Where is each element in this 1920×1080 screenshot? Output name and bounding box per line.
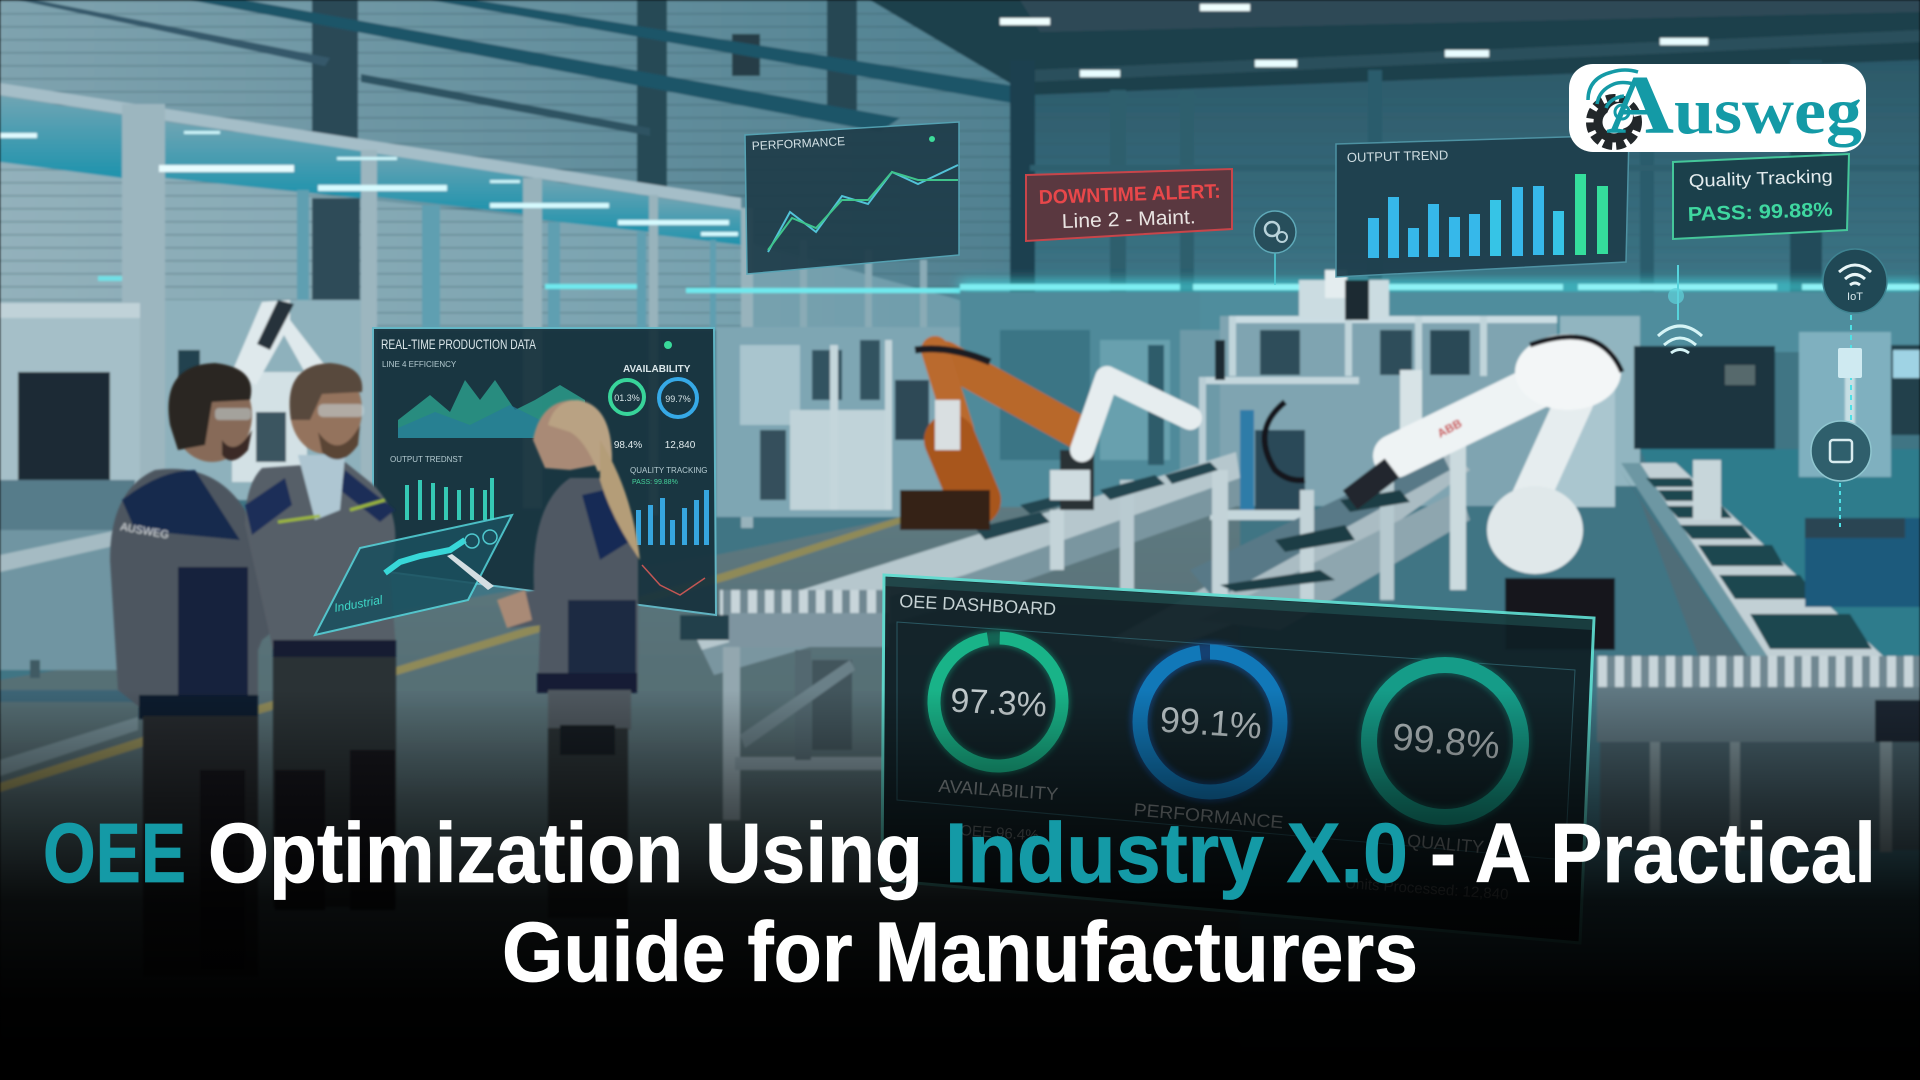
icon: IoT wifi badge: IoT	[1847, 291, 1863, 303]
area chart	[398, 380, 585, 438]
title line 1: Industry X.0	[945, 806, 1408, 900]
icon: IoT wifi badge	[1823, 249, 1887, 420]
panel: real-time production data: 01.3%	[614, 393, 640, 403]
left glass room	[0, 83, 960, 574]
panel: OEE dashboard: OEE 96.4%	[960, 822, 1039, 844]
panel: real-time production data: 98.4%	[614, 440, 642, 451]
front conveyor stand	[680, 590, 890, 820]
gauge: performance: 99.1%	[1159, 699, 1263, 747]
panel: performance chart: PERFORMANCE	[751, 134, 845, 153]
title line 1	[43, 806, 1876, 900]
large white robot arm	[1350, 334, 1622, 650]
logo wordmark: usweg	[1674, 75, 1862, 148]
right ceiling and wall	[870, 0, 1920, 352]
gauge: availability: AVAILABILITY	[938, 776, 1059, 804]
panel: real-time production data: LINE 4 EFFICIENCY	[382, 360, 457, 369]
bars	[1368, 174, 1608, 258]
panel: quality tracking: Quality Tracking	[1688, 166, 1833, 191]
panel: real-time production data: OUTPUT TREDNST	[390, 455, 463, 464]
output bars	[405, 478, 494, 520]
panel: OEE dashboard: Units Processed: 12,840	[1345, 875, 1509, 903]
panel: real-time production data: PASS: 99.88%	[632, 479, 678, 486]
icon: gear and wifi	[1588, 70, 1638, 143]
callout: downtime alert	[1026, 169, 1232, 241]
right conveyor line	[1597, 460, 1920, 852]
panel: OEE dashboard: OEE DASHBOARD	[899, 591, 1057, 619]
gauge: quality: 99.8%	[1391, 716, 1502, 768]
icon: chip badge	[1811, 421, 1871, 530]
panel: real-time production data: AVAILABILITY	[623, 364, 691, 375]
bottom dark gradient	[0, 690, 1920, 1080]
small white robot	[1050, 378, 1190, 500]
panel: real-time production data: REAL-TIME PRODUCTION DATA	[381, 336, 536, 352]
gauge: quality: QUALITY	[1406, 831, 1485, 857]
title line 2: Guide for Manufacturers	[502, 905, 1418, 999]
gauge: quality	[1369, 665, 1521, 857]
title line 1: OEE	[43, 806, 186, 900]
panel: real-time production data: QUALITY TRACKING	[630, 466, 708, 475]
left side machines	[0, 300, 361, 678]
logo badge	[1569, 59, 1866, 152]
quality bars	[636, 490, 709, 545]
icon: tablet	[447, 554, 494, 590]
factory floor	[0, 449, 1920, 1080]
callout: downtime alert: Line 2 - Maint.	[1061, 206, 1196, 233]
callout: downtime alert: DOWNTIME ALERT:	[1038, 181, 1221, 209]
person: left engineer	[110, 363, 335, 976]
panel: real-time production data: 12,840	[665, 440, 696, 451]
availability rings	[610, 379, 697, 417]
panel: real-time production data	[373, 328, 716, 615]
panel: quality tracking: PASS: 99.88%	[1687, 199, 1833, 226]
panel: handheld holographic display	[315, 515, 512, 635]
panel: performance chart	[745, 122, 959, 274]
panel: output trend chart: OUTPUT TREND	[1347, 147, 1448, 165]
gauge: performance	[1133, 652, 1284, 833]
logo wordmark	[1606, 59, 1862, 152]
large white robot arm: ABB	[1435, 416, 1465, 441]
title line 1: Optimization Using	[208, 806, 923, 900]
title line 1: - A Practical	[1430, 806, 1876, 900]
orange robot arm	[900, 349, 1099, 530]
panel: quality tracking	[1673, 154, 1849, 239]
icon: wifi signal	[1658, 265, 1702, 353]
central conveyor lines	[690, 420, 1470, 675]
logo wordmark: A	[1606, 59, 1674, 152]
title	[43, 806, 1876, 999]
panel: output trend chart	[1336, 135, 1629, 277]
panel: OEE dashboard	[882, 575, 1594, 943]
gauge: performance: PERFORMANCE	[1133, 800, 1284, 833]
panel: handheld holographic display: Industrial	[333, 593, 384, 615]
panel: real-time production data: 99.7%	[665, 394, 691, 404]
person: centre engineer	[245, 363, 396, 910]
left upper wall and ceiling beams	[0, 0, 1040, 330]
mid background machines	[716, 270, 1920, 520]
gauge: availability	[932, 636, 1064, 804]
person: right engineer	[497, 400, 640, 918]
person: left engineer: AUSWEG	[119, 521, 170, 541]
gauge: availability: 97.3%	[949, 682, 1048, 725]
icon: gear badge	[1254, 211, 1296, 285]
